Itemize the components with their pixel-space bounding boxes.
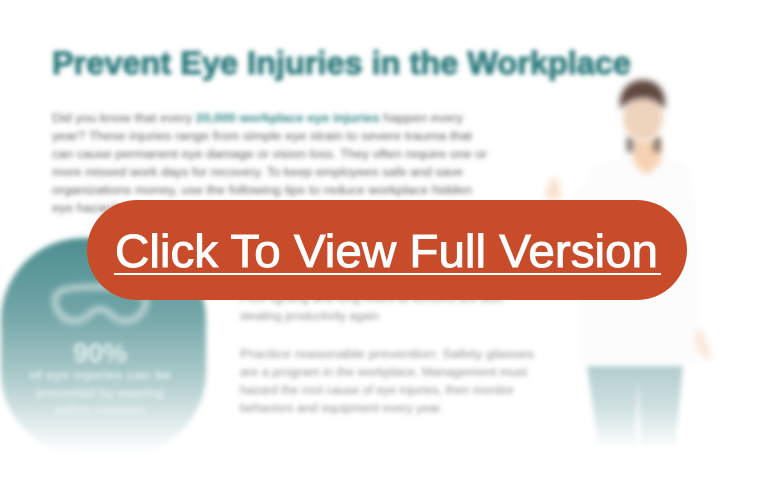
body text right of blob: Practice reasonable prevention: Safety glasses	[240, 349, 534, 361]
stat: 90%: 90%	[73, 338, 127, 368]
button: click to view full version	[87, 200, 687, 300]
body text right of blob: are a program in the workplace. Management must	[240, 367, 528, 379]
pants	[587, 366, 683, 450]
body text right of blob: hazard the root cause of eye injuries, then monitor	[240, 385, 514, 397]
shirt	[568, 155, 698, 363]
face	[623, 95, 663, 141]
body text right of blob: behaviors and equipment every year.	[240, 403, 443, 415]
button underline	[114, 273, 661, 275]
body text right of blob: stealing productivity again	[240, 311, 379, 323]
stat caption	[29, 368, 171, 417]
button label: Click To View Full Version	[115, 225, 658, 277]
title: Prevent Eye Injuries in the Workplace	[52, 45, 631, 81]
intro paragraph: Did you know that every 20,000 workplace eye injuries happen every	[52, 113, 463, 125]
intro paragraph: year? These injuries range from simple eye strain to severe trauma that	[52, 131, 473, 143]
intro paragraph: more missed work days for recovery. To keep employees safe and save	[52, 167, 463, 179]
left hand	[544, 177, 561, 200]
button background	[87, 200, 687, 300]
collar hair	[627, 137, 660, 152]
intro paragraph: can cause permanent eye damage or vision loss. They often require one or	[52, 149, 487, 161]
stat caption: safety eyewear	[55, 403, 145, 417]
right hand	[696, 328, 712, 360]
hair	[620, 80, 665, 109]
stat caption: of eye injuries can be	[29, 368, 171, 382]
intro paragraph: organizations money, use the following tips to reduce workplace hidden	[52, 185, 472, 197]
intro paragraph: eye hazards and prevent injuries on the job every single working day.	[52, 203, 452, 215]
stat caption: prevented by wearing	[36, 386, 164, 400]
body text right of blob: Poor lighting and long hours at screens are also	[240, 293, 503, 305]
body text right of blob	[240, 293, 534, 415]
blob background	[1, 238, 206, 454]
neck	[633, 140, 661, 173]
panel: statistic blob	[1, 238, 206, 454]
intro paragraph	[52, 113, 487, 215]
illustration: person	[544, 80, 712, 450]
icon: safety goggles	[55, 287, 146, 321]
